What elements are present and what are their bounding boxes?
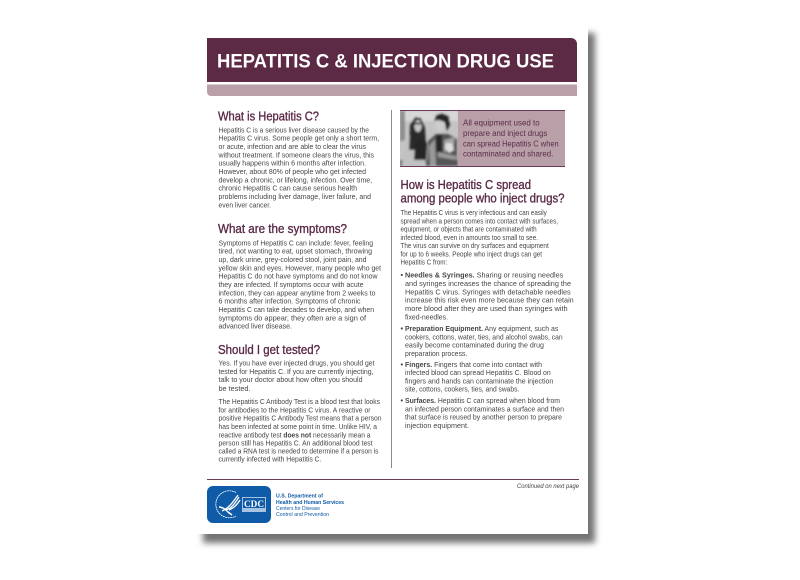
bullet: fingers bbox=[400, 360, 553, 394]
bullet: fingers: • bbox=[400, 360, 404, 369]
text block: testing advice bbox=[218, 358, 374, 393]
text block: antibody test: for antibodies to the Hepatitis C virus. A reactive or bbox=[218, 405, 371, 414]
text block: symptoms: advanced liver disease. bbox=[218, 322, 292, 331]
text block: testing advice: tested for Hepatitis C. If you are currently injecting, bbox=[218, 367, 374, 376]
text block: how it spreads intro: for up to 6 weeks. People who inject drugs can get bbox=[400, 249, 542, 258]
text block: what is hepatitis C: Hepatitis C virus. Some people get only a short term, bbox=[218, 134, 379, 143]
text block: symptoms: they are infected. If symptoms occur with acute bbox=[218, 280, 364, 289]
text block: antibody test: person still has Hepatitis C. An additional blood test bbox=[218, 439, 372, 448]
bullet: fingers: site, cottons, cookers, ties, and swabs. bbox=[405, 385, 519, 394]
text block: testing advice: be tested. bbox=[218, 384, 250, 393]
heading: How is Hepatitis C spread among people who inject drugs?: among people who inject drugs? bbox=[400, 190, 564, 206]
heading: How is Hepatitis C spread among people who inject drugs?: How is Hepatitis C spread bbox=[400, 177, 531, 192]
text block: what is hepatitis C: or acute, infection and are able to clear the virus bbox=[218, 142, 366, 151]
bullet: preparation equipment: cookers, cottons, water, ties, and alcohol swabs, can bbox=[405, 332, 563, 341]
text block: symptoms: yellow skin and eyes. However, many people who get bbox=[218, 263, 381, 272]
bullet: preparation equipment bbox=[400, 324, 563, 358]
text block: how it spreads intro: infected blood, even in amounts too small to see. bbox=[400, 233, 538, 242]
heading: What are the symptoms?: What are the symptoms? bbox=[218, 221, 347, 236]
callout: equipment warning bbox=[400, 110, 565, 167]
text block: how it spreads intro bbox=[400, 208, 558, 267]
callout text: can spread Hepatitis C when bbox=[463, 138, 559, 148]
bullet: needles and syringes: increase this risk even more because they can retain bbox=[405, 296, 574, 305]
text block: symptoms: Hepatitis C do not have symptoms and do not know bbox=[218, 272, 378, 281]
bullet: surfaces bbox=[400, 396, 564, 430]
heading: What is Hepatitis C?: What is Hepatitis C? bbox=[218, 108, 319, 124]
bullet: needles and syringes: • bbox=[400, 271, 404, 280]
continued note: Continued on next page bbox=[517, 483, 580, 490]
text block: antibody test: called a RNA test is needed to determine if a person is bbox=[218, 447, 379, 456]
text block: what is hepatitis C: without treatment. If someone clears the virus, this bbox=[218, 150, 374, 159]
bullet: surfaces: an infected person contaminates a surface and then bbox=[405, 404, 564, 413]
bullet: fingers: Fingers. Fingers that come into contact with bbox=[405, 360, 542, 369]
text block: symptoms: Symptoms of Hepatitis C can include: fever, feeling bbox=[218, 238, 373, 247]
logo: HHS and CDC bbox=[207, 486, 344, 523]
bullet: needles and syringes: and syringes increases the chance of spreading the bbox=[405, 279, 571, 288]
text block: what is hepatitis C: However, about 80% of people who get infected bbox=[218, 167, 366, 176]
callout text: prepare and inject drugs bbox=[463, 128, 548, 138]
bullet: needles and syringes: fixed-needles. bbox=[405, 312, 448, 321]
text block: antibody test: The Hepatitis C Antibody Test is a blood test that looks bbox=[218, 397, 380, 406]
bullet: preparation equipment: Preparation Equipment. Any equipment, such as bbox=[405, 324, 559, 333]
text block: symptoms: infection, they can appear anytime from 2 weeks to bbox=[218, 288, 376, 297]
text block: what is hepatitis C: chronic Hepatitis C can cause serious health bbox=[218, 184, 357, 193]
text block: how it spreads intro: equipment, or objects that are contaminated with bbox=[400, 225, 537, 234]
bullet: needles and syringes: Hepatitis C virus. Syringes with detachable needles bbox=[405, 287, 571, 296]
title banner bbox=[207, 38, 577, 96]
text block: antibody test: reactive antibody test does not necessarily mean a bbox=[218, 430, 371, 439]
text block: how it spreads intro: spread when a person comes into contact with surfaces, bbox=[400, 216, 558, 225]
bullet: needles and syringes: Needles & Syringes. Sharing or reusing needles bbox=[405, 271, 564, 280]
agency name: Control and Prevention bbox=[276, 512, 329, 518]
icon: HHS eagle bbox=[216, 491, 240, 518]
callout text: contaminated and shared. bbox=[463, 149, 553, 159]
bullet: preparation equipment: preparation process. bbox=[405, 349, 467, 358]
bullet: preparation equipment: • bbox=[400, 324, 404, 333]
bullet: needles and syringes: more blood after they are used than syringes with bbox=[405, 304, 568, 313]
bullet: needles and syringes bbox=[400, 271, 574, 321]
text block: what is hepatitis C: usually happens within 6 months after infection. bbox=[218, 159, 366, 168]
text block: antibody test: has been infected at some point in time. Unlike HIV, a bbox=[218, 422, 378, 431]
text block: testing advice: Yes. If you have ever injected drugs, you should get bbox=[218, 358, 374, 368]
text block: testing advice: talk to your doctor about how often you should bbox=[218, 375, 362, 384]
callout text bbox=[463, 118, 559, 159]
bullet: fingers: infected blood can spread Hepatitis C. Blood on bbox=[405, 368, 551, 377]
bullet: surfaces: Surfaces. Hepatitis C can spread when blood from bbox=[405, 396, 560, 405]
text block: what is hepatitis C bbox=[218, 125, 379, 209]
agency name: Centers for Disease bbox=[276, 506, 320, 512]
page drop shadow bbox=[0, 0, 595, 543]
bullet: preparation equipment: easily become contaminated during the drug bbox=[405, 341, 544, 350]
agency name bbox=[276, 494, 344, 518]
bullet: fingers: fingers and hands can contaminate the injection bbox=[405, 376, 553, 385]
text block: how it spreads intro: Hepatitis C from: bbox=[400, 258, 447, 267]
icon: CDC mark: CDC bbox=[244, 500, 264, 510]
agency name: Health and Human Services bbox=[276, 500, 344, 506]
bullet: surfaces: that surface is reused by another person to prepare bbox=[405, 413, 562, 422]
text block: what is hepatitis C: problems including liver damage, liver failure, and bbox=[218, 192, 371, 201]
agency name: U.S. Department of bbox=[276, 494, 323, 500]
photo: two people seated bbox=[400, 111, 458, 166]
text block: antibody test: positive Hepatitis C Antibody Test means that a person bbox=[218, 414, 382, 423]
text block: what is hepatitis C: even liver cancer. bbox=[218, 200, 271, 209]
bullet: surfaces: injection equipment. bbox=[405, 421, 469, 430]
text block: what is hepatitis C: develop a chronic, or lifelong, infection. Over time, bbox=[218, 175, 372, 184]
text block: symptoms: symptoms do appear, they often are a sign of bbox=[218, 313, 367, 322]
heading: Should I get tested?: Should I get tested? bbox=[218, 342, 320, 357]
title: HEPATITIS C & INJECTION DRUG USE bbox=[217, 50, 554, 72]
callout text: All equipment used to bbox=[463, 118, 540, 128]
text block: how it spreads intro: The virus can survive on dry surfaces and equipment bbox=[400, 241, 549, 250]
text block: what is hepatitis C: Hepatitis C is a serious liver disease caused by the bbox=[218, 125, 369, 134]
text block: symptoms: up, dark urine, grey-colored stool, joint pain, and bbox=[218, 255, 366, 264]
text block: how it spreads intro: The Hepatitis C virus is very infectious and can easily bbox=[400, 208, 547, 217]
text block: symptoms bbox=[218, 238, 381, 331]
text block: antibody test: currently infected with Hepatitis C. bbox=[218, 455, 322, 464]
text block: symptoms: Hepatitis C can take decades to develop, and when bbox=[218, 305, 374, 314]
text block: symptoms: 6 months after infection. Symptoms of chronic bbox=[218, 297, 361, 306]
bullet: surfaces: • bbox=[400, 396, 404, 405]
text block: antibody test bbox=[218, 397, 382, 464]
text block: symptoms: tired, not wanting to eat, upset stomach, throwing bbox=[218, 247, 372, 256]
heading: How is Hepatitis C spread among people who inject drugs? bbox=[400, 177, 564, 206]
